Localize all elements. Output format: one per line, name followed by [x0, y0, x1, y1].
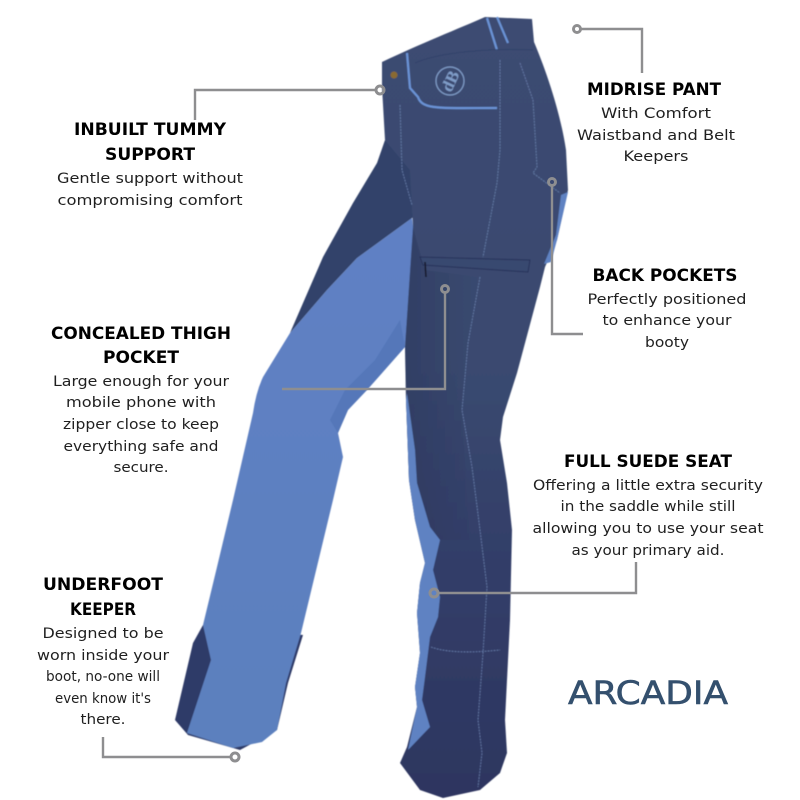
callout: underfoot keeper: worn inside your — [37, 648, 169, 664]
inner leg shadow — [405, 227, 480, 540]
waistband and piping — [487, 17, 508, 50]
callout: concealed thigh pocket: everything safe and — [64, 439, 218, 455]
callout: inbuilt tummy support: compromising comfort — [58, 193, 243, 209]
callout: full suede seat: Offering a little extra security — [533, 478, 763, 494]
callout: back pockets: to enhance your — [602, 313, 732, 329]
callout: full suede seat: in the saddle while still — [560, 499, 736, 515]
back leg and hips — [382, 17, 568, 798]
zipper pocket — [420, 257, 530, 277]
leader: thigh pocket — [282, 286, 448, 389]
leader: underfoot keeper — [103, 737, 239, 761]
callout: inbuilt tummy support: INBUILT TUMMY — [74, 120, 227, 139]
callout: concealed thigh pocket — [51, 324, 231, 476]
front leg: upper navy panel — [290, 140, 425, 333]
callout: full suede seat: as your primary aid. — [572, 543, 724, 559]
front leg: dark cuff — [175, 625, 303, 750]
callout: underfoot keeper: there. — [80, 712, 126, 728]
leader: midrise pant — [574, 26, 642, 73]
callout: midrise pant: MIDRISE PANT — [587, 80, 722, 99]
callout: underfoot keeper: Designed to be — [42, 626, 164, 642]
callout: full suede seat: FULL SUEDE SEAT — [564, 452, 733, 471]
callout: inbuilt tummy support: SUPPORT — [105, 145, 196, 164]
callout: midrise pant: Keepers — [624, 149, 688, 165]
callout: inbuilt tummy support — [57, 120, 243, 209]
callout: back pockets: BACK POCKETS — [592, 266, 738, 285]
callout: concealed thigh pocket: Large enough for your — [53, 374, 229, 390]
callout: concealed thigh pocket: mobile phone with — [66, 395, 216, 411]
callout: underfoot keeper: even know it's — [55, 691, 151, 707]
callout: back pockets: booty — [645, 335, 689, 351]
leader: back pockets — [548, 178, 583, 334]
callout: underfoot keeper: UNDERFOOT — [43, 575, 164, 594]
callout: back pockets — [588, 266, 746, 351]
suede seat strip — [406, 393, 440, 750]
leader: suede seat — [430, 562, 636, 597]
logo badge: dB — [437, 68, 463, 95]
callout: midrise pant: Waistband and Belt — [577, 128, 735, 144]
callout: concealed thigh pocket: POCKET — [103, 348, 180, 367]
pants illustration — [175, 17, 568, 798]
stitching — [462, 60, 500, 787]
seat patch — [544, 192, 568, 264]
callout: midrise pant — [577, 80, 735, 165]
leader: tummy support — [195, 86, 384, 120]
callout: underfoot keeper: KEEPER — [70, 600, 136, 619]
callout: concealed thigh pocket: zipper close to keep — [63, 417, 219, 433]
callout: midrise pant: With Comfort — [601, 106, 711, 122]
product name: ARCADIA — [568, 674, 728, 712]
callout: concealed thigh pocket: CONCEALED THIGH — [51, 324, 231, 343]
callout: inbuilt tummy support: Gentle support without — [57, 171, 243, 187]
callout: underfoot keeper: boot, no-one will — [46, 669, 160, 685]
callout: back pockets: Perfectly positioned — [588, 292, 746, 308]
callout: concealed thigh pocket: secure. — [114, 460, 168, 476]
callout: full suede seat — [532, 452, 764, 559]
front leg shading — [330, 320, 405, 433]
front leg: light suede — [187, 218, 416, 748]
callout: underfoot keeper — [37, 575, 169, 728]
callout: full suede seat: allowing you to use your seat — [532, 521, 764, 537]
